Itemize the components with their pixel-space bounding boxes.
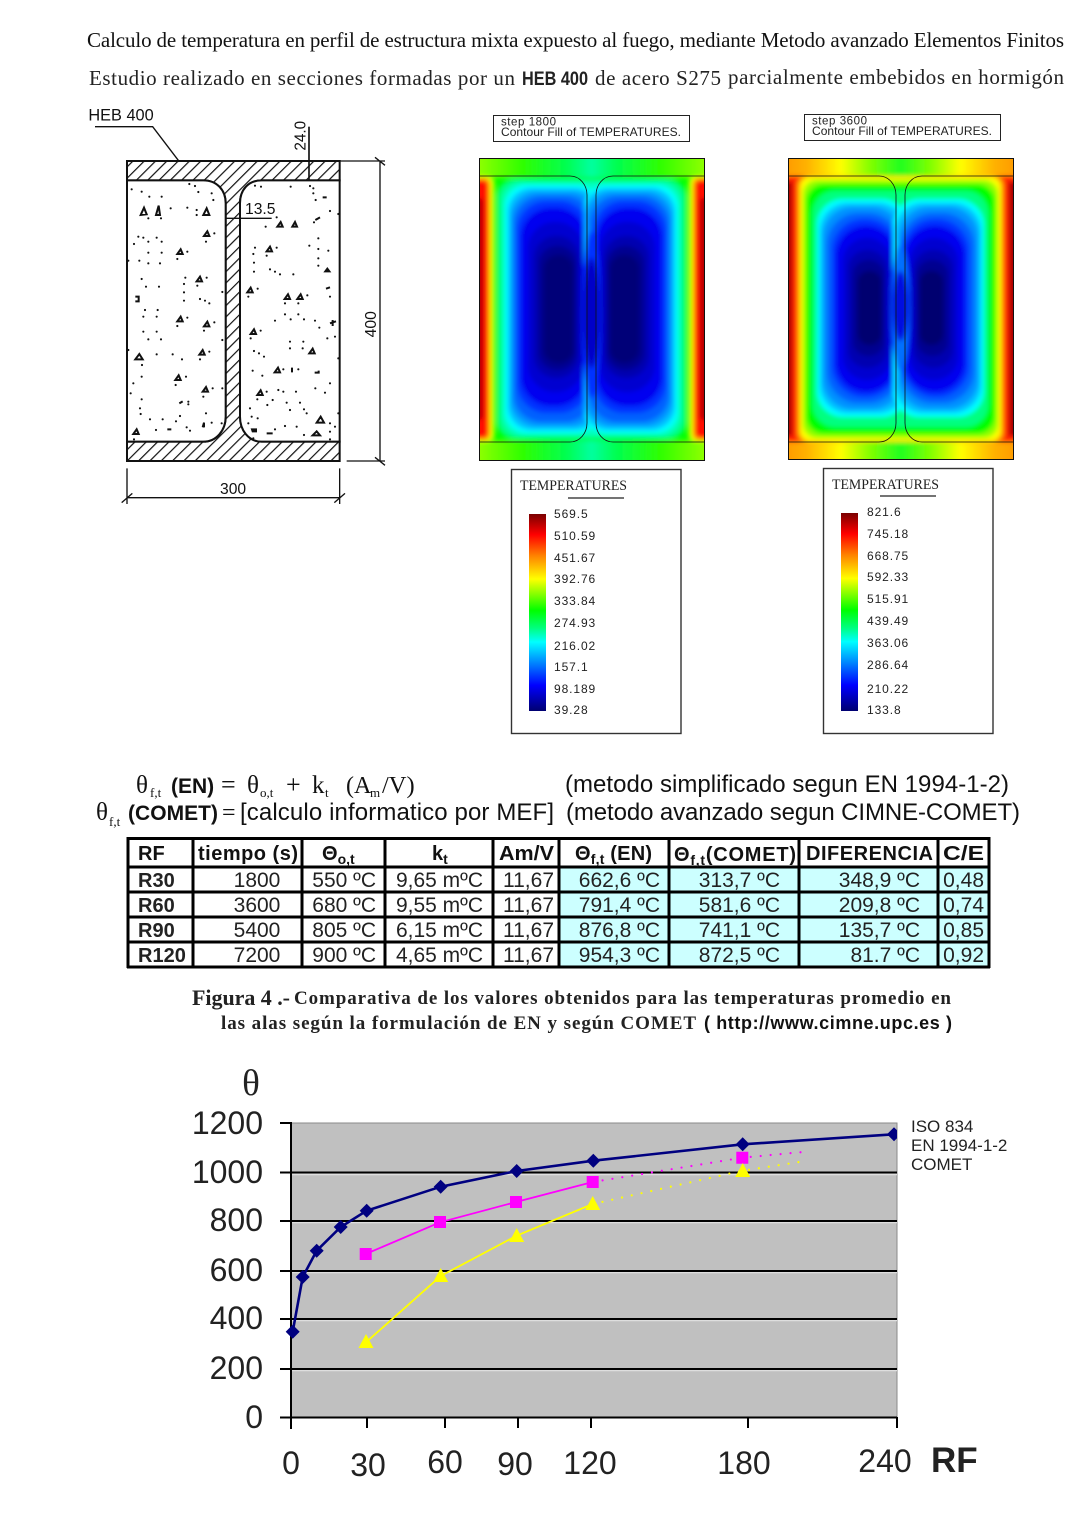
temperature contour: step 3600: [788, 158, 1014, 460]
header row: RF: [138, 843, 165, 865]
step label 3600: Contour Fill of TEMPERATURES.: [812, 124, 992, 138]
legend: step 3600: 133.8: [867, 703, 902, 717]
series legend: ISO 834: [911, 1117, 973, 1136]
figure caption: Figura 4 .-: [192, 985, 290, 1010]
right lobe layers: [893, 199, 984, 417]
x axis labels: 0: [282, 1445, 300, 1481]
row R60: 9,55 mºC: [396, 894, 483, 917]
formula: EN: k: [312, 772, 325, 799]
row R90: 876,8 ºC: [579, 919, 660, 942]
row R90: 11,67: [503, 919, 554, 942]
row R60: 0,74: [943, 894, 984, 917]
dimension: 300: [122, 468, 345, 504]
row R120: 7200: [234, 944, 280, 967]
formula: EN: o,t: [260, 785, 274, 800]
step label 1800: step 1800: [501, 116, 556, 128]
row R60: 209,8 ºC: [839, 894, 920, 917]
formula: EN: θ: [247, 772, 259, 799]
row R30: 0,48: [943, 869, 984, 892]
figure caption: las alas según la formulación de EN y según COMET: [221, 1013, 696, 1034]
comparison table: [127, 837, 990, 968]
step label 3600: step 3600: [812, 116, 867, 128]
row R120: 0,92: [943, 944, 984, 967]
temperature contour: step 1800: [479, 158, 705, 461]
aggregate triangles: [133, 197, 336, 435]
formula: EN: +: [286, 770, 301, 799]
header row: Am/V: [499, 843, 555, 865]
dimension: 400: [340, 157, 385, 465]
left lobe layers: [817, 199, 908, 417]
section outline: [788, 176, 1013, 442]
row R30: 9,65 mºC: [396, 869, 483, 892]
formula: EN: =: [221, 770, 236, 799]
step label 1800: Contour Fill of TEMPERATURES.: [501, 125, 681, 139]
formula: EN: f,t: [150, 785, 162, 800]
subtitle: [89, 65, 1064, 90]
legend: step 3600: 668.75: [867, 549, 909, 563]
legend: step 3600: 592.33: [867, 570, 909, 584]
header row: k: [432, 843, 443, 865]
row R30: 662,6 ºC: [579, 869, 660, 892]
legend: step 1800: TEMPERATURES: [520, 478, 627, 494]
y axis labels: 1000: [192, 1154, 263, 1190]
concrete right: [240, 180, 340, 442]
row R60: R60: [138, 895, 175, 917]
x axis labels: 30: [350, 1447, 386, 1483]
step label 1800: [494, 116, 690, 142]
legend: step 3600: 515.91: [867, 592, 909, 606]
x axis labels: 120: [563, 1445, 617, 1481]
y axis labels: 400: [210, 1300, 263, 1336]
legend: step 3600: 363.06: [867, 636, 909, 650]
dimension: 13.5: [226, 216, 272, 220]
x axis labels: 240: [858, 1443, 912, 1479]
row R120: [138, 944, 984, 967]
row R90: 135,7 ºC: [839, 919, 920, 942]
y axis labels: 200: [210, 1350, 263, 1386]
legend: step 1800: 157.1: [554, 660, 589, 674]
web crossing: [582, 231, 600, 399]
legend: step 1800: 510.59: [554, 529, 596, 543]
row R90: 805 ºC: [312, 919, 376, 942]
cross-section drawing: HEB 400: [88, 107, 385, 504]
legend: step 3600: 821.6: [867, 505, 902, 519]
row R30: 550 ºC: [312, 869, 376, 892]
subtitle: parcialmente embebidos en hormigón: [728, 65, 1064, 89]
row R120: 4,65 mºC: [396, 944, 483, 967]
dimension labels: [88, 107, 380, 498]
header row: (COMET): [706, 844, 796, 866]
x axis title: RF: [931, 1441, 978, 1480]
formula: COMET: [96, 799, 554, 829]
subtitle: Estudio realizado en secciones formadas por un: [89, 66, 516, 90]
formula: EN: (EN): [171, 775, 214, 798]
steel profile: [127, 161, 340, 461]
formula: EN: θ: [136, 772, 148, 799]
y axis title: θ: [242, 1063, 260, 1104]
header row: t: [443, 851, 448, 867]
series: EN 1994-1-2: [360, 1152, 806, 1260]
legend: step 3600: 439.49: [867, 614, 909, 628]
series: COMET: [358, 1161, 804, 1348]
header row: tiempo (s): [198, 843, 298, 865]
dimension labels: 400: [363, 311, 380, 337]
y axis labels: 600: [210, 1252, 263, 1288]
x axis labels: 60: [427, 1444, 463, 1480]
method note: simplified: (metodo simplificado segun EN 1994-1-2): [565, 771, 1009, 798]
row R90: [138, 919, 984, 942]
concrete dots: [128, 184, 338, 439]
formula: COMET: f,t: [109, 814, 121, 829]
y axis labels: 800: [210, 1202, 263, 1238]
legend: step 1800: 98.189: [554, 682, 596, 696]
x axis labels: 90: [497, 1446, 533, 1482]
row R60: 791,4 ºC: [579, 894, 660, 917]
row R120: 900 ºC: [312, 944, 376, 967]
row R30: [138, 869, 984, 892]
y axis labels: [192, 1105, 263, 1435]
header row: f,t: [690, 852, 705, 868]
step label 3600: [804, 114, 1000, 140]
legend: step 1800: 274.93: [554, 616, 596, 630]
row R30: 348,9 ºC: [839, 869, 920, 892]
legend: step 3600: TEMPERATURES: [832, 477, 939, 493]
row R120: 11,67: [503, 944, 554, 967]
y axis labels: 0: [245, 1399, 263, 1435]
header row: Θ: [322, 843, 338, 865]
legend: step 3600: 745.18: [867, 527, 909, 541]
title: Calculo de temperatura en perfil de estructura mixta expuesto al fuego, mediante Metodo avanzado Elementos Finitos: [87, 28, 1064, 52]
formula: EN: m: [370, 785, 380, 800]
legend: step 1800: 569.5: [554, 507, 589, 521]
section outline: [479, 176, 704, 442]
figure caption: ( http://www.cimne.upc.es ): [704, 1013, 952, 1033]
header row: C/E: [943, 843, 984, 865]
legend: step 1800: 39.28: [554, 703, 589, 717]
dimension labels: 13.5: [245, 201, 276, 218]
header row: DIFERENCIA: [806, 843, 933, 865]
series legend: COMET: [911, 1155, 972, 1174]
row R90: R90: [138, 920, 175, 942]
series: ISO 834: [286, 1127, 901, 1339]
row R30: 1800: [234, 869, 280, 892]
legend: step 3600: 210.22: [867, 682, 909, 696]
row R30: R30: [138, 870, 175, 892]
legend: step 1800: 392.76: [554, 572, 596, 586]
concrete left: [127, 180, 226, 442]
formula: EN: /V): [382, 772, 415, 799]
row R60: [138, 894, 984, 917]
left lobe layers: [505, 185, 599, 433]
line chart: temperature vs RF: [192, 1063, 1007, 1483]
x axis labels: [282, 1443, 912, 1483]
plot area: [291, 1123, 897, 1417]
header row: (EN): [605, 843, 652, 865]
row R60: 680 ºC: [312, 894, 376, 917]
header row: o,t: [338, 851, 355, 867]
row R90: 6,15 mºC: [396, 919, 483, 942]
row R120: 872,5 ºC: [699, 944, 780, 967]
web crossing: [892, 245, 910, 371]
row R90: 0,85: [943, 919, 984, 942]
method note: advanced: (metodo avanzado segun CIMNE-COMET): [566, 799, 1020, 826]
grid lines: [280, 1122, 897, 1429]
row R30: 313,7 ºC: [699, 869, 780, 892]
formula: EN: [136, 770, 415, 800]
row R60: 581,6 ºC: [699, 894, 780, 917]
header row: Θ: [575, 843, 591, 865]
formula: COMET: =: [222, 800, 236, 826]
y axis labels: 1200: [192, 1105, 263, 1141]
leader: HEB 400: [95, 127, 179, 162]
header row: [138, 843, 984, 868]
x axis labels: 180: [717, 1445, 771, 1481]
row R30: 11,67: [503, 869, 554, 892]
dimension labels: HEB 400: [88, 107, 154, 125]
legend: step 1800: 216.02: [554, 639, 596, 653]
row R90: 5400: [234, 919, 280, 942]
formula: COMET: [calculo informatico por MEF]: [240, 799, 554, 826]
row R60: 3600: [234, 894, 280, 917]
header row: Θ: [674, 844, 690, 866]
legend: step 1800: 333.84: [554, 594, 596, 608]
row R120: 81.7 ºC: [850, 944, 920, 967]
legend: step 3600: [824, 468, 993, 734]
right lobe layers: [584, 185, 678, 433]
subtitle: HEB 400: [522, 69, 588, 90]
header row: f,t: [591, 851, 605, 867]
row R60: 11,67: [503, 894, 554, 917]
subtitle: de acero S275: [595, 66, 721, 90]
series legend: [911, 1117, 1007, 1174]
figure caption: Comparativa de los valores obtenidos para las temperaturas promedio en: [294, 988, 951, 1009]
formula: COMET: θ: [96, 799, 108, 826]
figure caption: [192, 985, 952, 1034]
row R90: 741,1 ºC: [699, 919, 780, 942]
formula: COMET: (COMET): [128, 802, 218, 825]
legend: step 3600: 286.64: [867, 658, 909, 672]
series legend: EN 1994-1-2: [911, 1136, 1007, 1155]
dimension labels: 300: [220, 481, 246, 498]
dimension labels: 24.0: [292, 121, 309, 151]
formula: EN: t: [325, 785, 329, 800]
formula: EN: (A: [346, 773, 372, 799]
row R120: R120: [138, 945, 186, 967]
dimension: 24.0: [306, 127, 311, 180]
legend: step 1800: [512, 470, 681, 734]
legend: step 1800: 451.67: [554, 551, 596, 565]
row R120: 954,3 ºC: [579, 944, 660, 967]
